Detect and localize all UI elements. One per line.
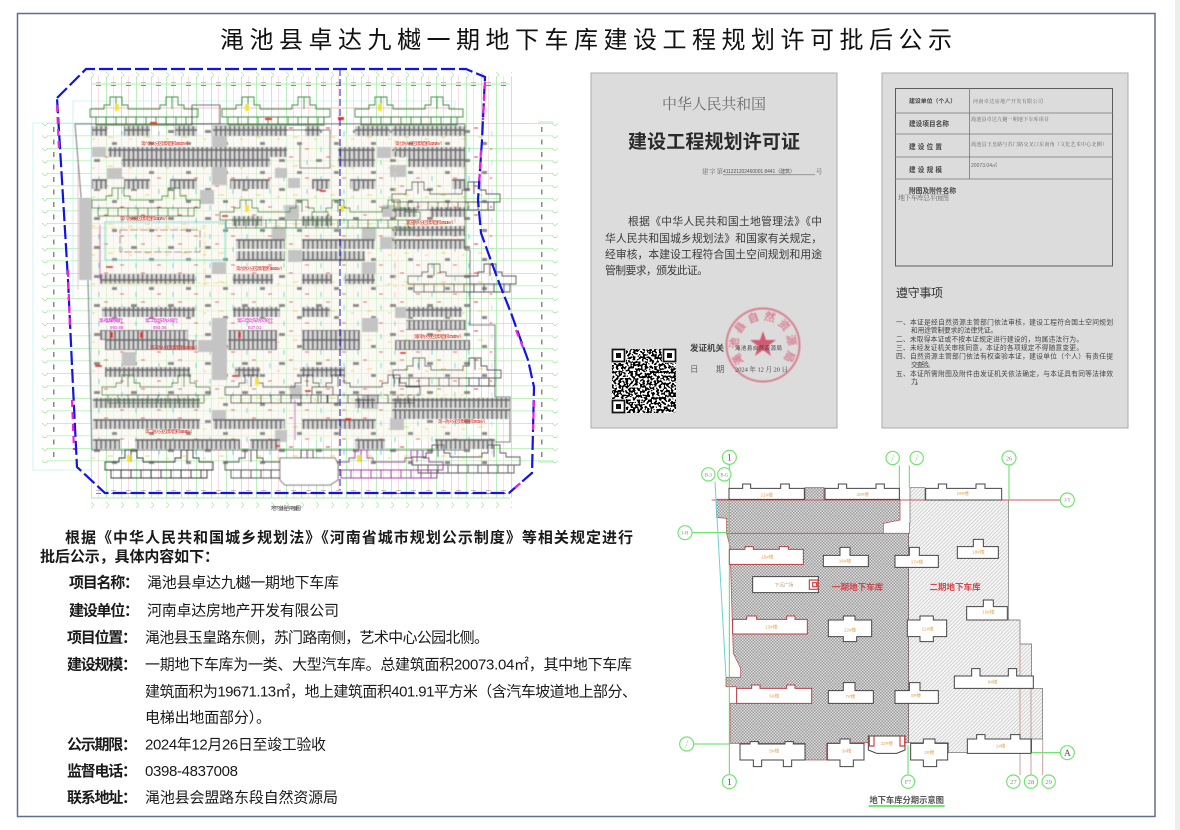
panel: master site plan	[33, 69, 558, 512]
compliance notes: 交查验。	[911, 360, 934, 369]
compliance notes	[896, 318, 1113, 386]
tower labels: 5#楼	[769, 748, 780, 755]
legal basis paragraph: 华人民共和国城乡规划法》和国家有关规定，	[605, 231, 822, 245]
project information table: 河南卓达房地产开发有限公司	[973, 98, 1043, 105]
tower labels: 9#楼	[988, 678, 998, 685]
tower labels: 7#楼	[845, 693, 856, 700]
axis labels: B-G	[720, 473, 729, 478]
certificate number	[702, 166, 823, 176]
tower labels: 11#楼	[922, 625, 934, 632]
certificate number: 建字第	[702, 166, 724, 176]
project information table	[895, 88, 1113, 266]
compliance notes: 和用途管制要求的法律凭证。	[911, 326, 997, 334]
landscape and service lines	[92, 105, 480, 440]
fire zone labels: 第九防火分区建筑面积2864.11㎡	[236, 265, 282, 272]
official seal	[725, 307, 801, 383]
issuing authority: 日	[690, 364, 699, 374]
tower labels: 17#楼	[911, 558, 924, 565]
developer: 河南卓达房地产开发有限公司	[147, 602, 339, 620]
axis labels: 1	[727, 778, 732, 788]
project information table: 建设单位（个人）	[909, 97, 956, 105]
construction scale: 建设规模：	[67, 656, 137, 674]
panel: permit certificate back	[882, 73, 1128, 428]
phase 2 label: 二期地下车库	[929, 581, 981, 592]
tower labels: 22#楼	[880, 740, 893, 747]
phase 1 area	[716, 488, 909, 760]
axis labels: 1	[727, 454, 732, 464]
axis labels: /	[915, 454, 918, 465]
legal basis paragraph: 经审核，本建设工程符合国土空间规划和用途	[605, 247, 822, 261]
legal basis paragraph: 根据《中华人民共和国土地管理法》《中	[628, 214, 822, 228]
fire zone labels	[120, 140, 485, 435]
intro paragraph: 批后公示，具体内容如下：	[40, 548, 219, 566]
country name: 中华人民共和国	[662, 96, 766, 113]
intro paragraph: 根据《中华人民共和国城乡规划法》《河南省城市规划公示制度》等相关规定进行	[65, 528, 633, 546]
fire zone labels: 第七防火分区建筑面积2478.78㎡	[395, 140, 442, 147]
certificate sheet	[591, 73, 837, 428]
tower labels	[760, 490, 1006, 756]
garage outline	[75, 124, 510, 450]
tower labels: 16#楼	[839, 558, 852, 565]
community centre	[280, 458, 338, 485]
axis labels: /	[685, 740, 688, 751]
issuing authority: 发证机关	[690, 343, 724, 353]
tower labels: 12#楼	[844, 626, 857, 633]
project information table: 渑池县卓达九樾一期地下车库项目	[971, 116, 1049, 123]
tower labels: 2#楼	[924, 749, 935, 756]
property boundary	[57, 69, 534, 493]
construction scale: 电梯出地面部分）。	[145, 710, 271, 726]
supervision phone: 监督电话：	[67, 763, 137, 780]
axis labels: 26	[1006, 456, 1012, 462]
axis lines	[692, 465, 1060, 775]
axis labels: F7	[905, 780, 911, 786]
core and ramp blocks	[79, 125, 409, 442]
compliance notes: 二、未取得本证或不按本证规定进行建设的，均属违法行为。	[896, 334, 1083, 344]
tower labels: 21#楼	[760, 492, 773, 499]
legal basis paragraph	[605, 214, 822, 277]
project information table: 建 设 位 置	[909, 142, 942, 151]
axis labels: /	[891, 454, 894, 465]
fire zone labels: 第六防火分区建筑面积2847.47㎡	[141, 140, 188, 147]
contact address	[67, 788, 338, 806]
publicity period: 2024年12月26日至竣工验收	[145, 736, 326, 754]
tower labels: 20#楼	[856, 491, 869, 498]
fire zone labels: 第三防火分区建筑面积2472.51㎡	[150, 344, 197, 351]
publicity period	[67, 736, 326, 754]
panel: garage phasing diagram	[678, 450, 1074, 807]
plan detail marks	[92, 125, 492, 465]
intro paragraph	[40, 528, 633, 566]
issuing authority: 2024 年 12 月 20 日	[735, 364, 788, 374]
project information table: 20073.04㎡	[971, 162, 997, 169]
publicity period: 公示期限：	[67, 736, 137, 754]
title: 渑池县卓达九樾一期地下车库建设工程规划许可批后公示	[220, 27, 952, 54]
phase 2 area	[909, 488, 1043, 753]
supervision phone: 0398-4837008	[145, 763, 238, 780]
axis labels: A	[1064, 749, 1071, 759]
electric vehicle fire unit labels: 第一电动车防火单元	[99, 317, 123, 324]
axis labels: J-H	[682, 532, 689, 537]
compliance notes: 力。	[911, 377, 922, 386]
certificate number: 411221202460001 8441（建筑）	[723, 168, 795, 175]
site plan grid	[33, 72, 558, 510]
compliance notes: 五、本证所需附图及附件由发证机关依法确定，与本证具有同等法律效	[896, 369, 1113, 378]
axis labels: B-3	[705, 473, 712, 478]
notice text block	[40, 528, 637, 806]
fire zone labels: 第一防火分区建筑面积2787.16㎡	[438, 418, 485, 425]
project information table: 地下车库总平面图	[898, 193, 949, 202]
tower labels: 19#楼	[956, 490, 969, 497]
electric vehicle fire unit labels: 第二电动车防火单元	[145, 317, 178, 324]
project name	[69, 574, 339, 592]
compliance heading: 遵守事项	[896, 285, 943, 300]
project name: 渑池县卓达九樾一期地下车库	[147, 574, 339, 592]
project information table: 附图及附件名称	[909, 186, 956, 195]
electric vehicle fire unit labels: 937.01	[248, 325, 262, 330]
issuing authority: 期	[716, 364, 725, 374]
electric vehicle fire unit labels	[99, 317, 273, 330]
site plan caption: 地下室组合平面图	[271, 504, 301, 512]
towers	[729, 484, 1033, 767]
diagram caption: 地下车库分期示意图	[869, 795, 944, 805]
developer: 建设单位：	[69, 602, 139, 620]
project information table: 建设项目名称	[909, 119, 949, 128]
electric vehicle fire unit labels: 993.06	[153, 325, 167, 330]
contact address: 联系地址：	[67, 788, 137, 806]
axis labels: 29	[1045, 779, 1053, 786]
issuing authority	[690, 343, 788, 374]
axis labels	[682, 454, 1071, 788]
phase divider line	[339, 69, 341, 490]
tower labels: 下沉广场	[775, 582, 794, 589]
fire zone labels: 第四防火分区建筑面积2714.07㎡	[414, 333, 461, 340]
project location: 项目位置：	[67, 628, 137, 646]
tower labels: 18#楼	[972, 548, 985, 555]
project information table: 渑池县玉皇路与苏门路交叉口东南角（文化艺术中心北侧）	[971, 141, 1107, 148]
electric vehicle fire unit labels: 第三电动车防火单元	[237, 317, 273, 324]
official seal: 渑池县自然资源局	[728, 310, 798, 366]
tower labels: 15#楼	[761, 554, 774, 561]
project information table: 建 设 规 模	[909, 165, 942, 174]
axis labels: 28	[1028, 779, 1035, 786]
axis markers	[678, 450, 1074, 789]
tower labels: 10#楼	[982, 609, 995, 616]
project location: 渑池县玉皇路东侧，苏门路南侧，艺术中心公园北侧。	[145, 630, 489, 646]
tower labels: 3#楼	[842, 748, 852, 755]
legal basis paragraph: 管制要求，颁发此证。	[605, 263, 708, 277]
QR code	[612, 349, 676, 413]
supervision phone	[67, 763, 238, 780]
tower labels: 1#楼	[996, 742, 1006, 749]
fire zone labels: 第五防火分区建筑面积2791.38㎡	[406, 219, 453, 226]
compliance notes: 三、未经发证机关审核同意，本证的各项规定不得随意变更。	[896, 343, 1083, 352]
construction scale	[67, 656, 637, 726]
issuing authority: 渑池县自然资源局	[735, 344, 782, 352]
tower labels: 13#楼	[765, 623, 778, 630]
parking rows	[92, 126, 510, 449]
construction scale: 一期地下车库为一类、大型汽车库。总建筑面积20073.04㎡，其中地下车库	[145, 656, 632, 674]
certificate title: 建设工程规划许可证	[628, 131, 800, 153]
axis labels: 27	[1010, 779, 1017, 786]
tower labels: 8#楼	[911, 692, 921, 699]
electric vehicle fire unit labels: 992.88	[110, 325, 124, 330]
construction scale: 建筑面积为19671.13㎡，地上建筑面积401.91平方米（含汽车坡道地上部分、	[145, 684, 637, 700]
certificate sheet	[882, 73, 1128, 428]
contact address: 渑池县会盟路东段自然资源局	[145, 790, 338, 806]
fire zone labels: 第二防火分区建筑面积2698.46㎡	[145, 428, 192, 435]
panel: permit certificate front	[590, 72, 838, 428]
developer	[69, 602, 339, 620]
underground garage floor plan	[75, 97, 520, 485]
compliance notes: 四、自然资源主管部门依法有权查验本证，建设单位（个人）有责任提	[896, 352, 1113, 360]
phase 1 label: 一期地下车库	[832, 581, 884, 592]
compliance notes: 一、本证是经自然资源主管部门依法审核，建设工程符合国土空间规划	[896, 318, 1113, 326]
fire zone labels: 第八防火分区建筑面积2410.76㎡	[120, 215, 167, 222]
certificate number: 号	[816, 166, 823, 176]
residential buildings	[90, 97, 520, 478]
axis labels: J-Y	[1064, 499, 1071, 504]
tower labels: 6#楼	[769, 692, 780, 699]
aisle tint	[92, 135, 465, 440]
project name: 项目名称：	[69, 574, 139, 592]
